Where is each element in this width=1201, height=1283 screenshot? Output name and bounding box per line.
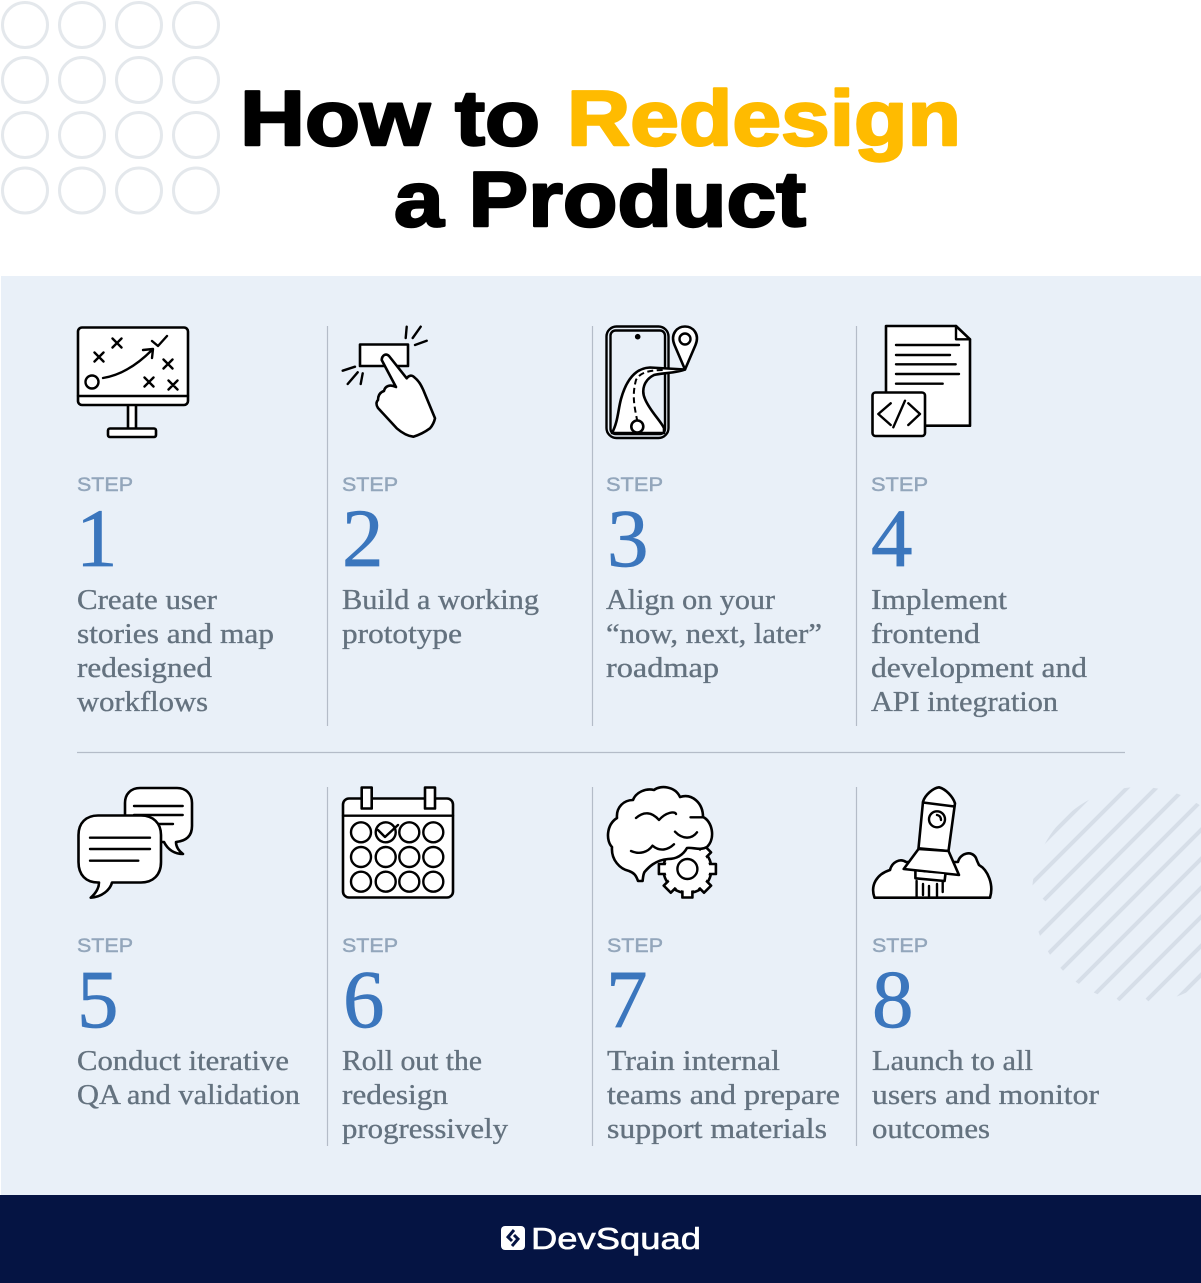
step text xyxy=(606,584,822,684)
icon: chat bubbles xyxy=(78,788,192,898)
step text: development and xyxy=(871,652,1088,684)
step text: workflows xyxy=(77,686,208,718)
step text xyxy=(872,1045,1099,1145)
step label: STEP xyxy=(607,936,663,957)
step label: STEP xyxy=(342,936,398,957)
icon: finger pressing button xyxy=(343,327,435,437)
step text: “now, next, later” xyxy=(606,618,822,650)
icon: phone with route xyxy=(606,326,697,438)
icon: brain and gear xyxy=(608,787,716,898)
step text: frontend xyxy=(871,618,981,650)
step text: Roll out the xyxy=(342,1045,482,1077)
title: a Product xyxy=(394,155,806,243)
step number: 1 xyxy=(76,492,118,584)
panel: step 8 xyxy=(872,787,1099,1145)
step text xyxy=(871,584,1088,718)
step number: 3 xyxy=(607,492,648,584)
step text: stories and map xyxy=(77,618,274,650)
title: Redesign xyxy=(567,74,961,162)
panel: step 1 xyxy=(76,328,274,718)
step number: 6 xyxy=(343,953,384,1045)
footer bar xyxy=(0,1195,1201,1283)
step text: API integration xyxy=(871,686,1059,718)
step text: QA and validation xyxy=(77,1079,301,1111)
step text xyxy=(342,1045,509,1145)
step text: Align on your xyxy=(606,584,775,616)
decorative hatch circle xyxy=(1032,788,1201,1001)
icon: document with code xyxy=(872,326,970,436)
step text: redesigned xyxy=(77,652,213,684)
step text: progressively xyxy=(342,1113,509,1145)
step text: prototype xyxy=(342,618,462,650)
step label: STEP xyxy=(77,936,133,957)
step text: Train internal xyxy=(607,1045,780,1077)
step text xyxy=(77,1045,301,1111)
step text xyxy=(77,584,274,718)
title xyxy=(240,74,961,243)
icon: rocket launch xyxy=(873,787,991,898)
step number: 7 xyxy=(606,953,648,1045)
step text: Launch to all xyxy=(872,1045,1033,1077)
step text: redesign xyxy=(342,1079,449,1111)
step text: Build a working xyxy=(342,584,539,616)
panel: steps background xyxy=(1,276,1201,1195)
step text xyxy=(342,584,539,650)
panel: step 3 xyxy=(606,326,822,684)
step text: Conduct iterative xyxy=(77,1045,289,1077)
logo wordmark: DevSquad xyxy=(531,1221,701,1256)
decorative circle grid xyxy=(2,2,218,213)
icon: logo mark xyxy=(501,1226,525,1250)
step label: STEP xyxy=(872,936,928,957)
panel: step 2 xyxy=(342,327,539,650)
step label: STEP xyxy=(606,475,663,496)
icon: strategy monitor xyxy=(78,328,188,437)
step text: roadmap xyxy=(606,652,719,684)
title: How to xyxy=(240,74,540,162)
step label: STEP xyxy=(77,475,133,496)
step text: users and monitor xyxy=(872,1079,1099,1111)
step text xyxy=(607,1045,840,1145)
step text: outcomes xyxy=(872,1113,990,1145)
step number: 8 xyxy=(872,953,914,1045)
step label: STEP xyxy=(342,475,398,496)
logo: DevSquad xyxy=(501,1221,701,1256)
step text: Create user xyxy=(77,584,217,616)
step label: STEP xyxy=(871,475,928,496)
step text: support materials xyxy=(607,1113,827,1145)
step number: 2 xyxy=(342,492,384,584)
panel: step 6 xyxy=(342,788,509,1145)
step number: 4 xyxy=(871,492,912,584)
step text: teams and prepare xyxy=(607,1079,840,1111)
panel: step 4 xyxy=(871,326,1088,718)
step text: Implement xyxy=(871,584,1007,616)
step number: 5 xyxy=(77,953,118,1045)
column and row dividers xyxy=(77,326,1125,1146)
panel: step 7 xyxy=(606,787,840,1145)
icon: calendar xyxy=(343,788,453,898)
panel: step 5 xyxy=(77,788,301,1111)
